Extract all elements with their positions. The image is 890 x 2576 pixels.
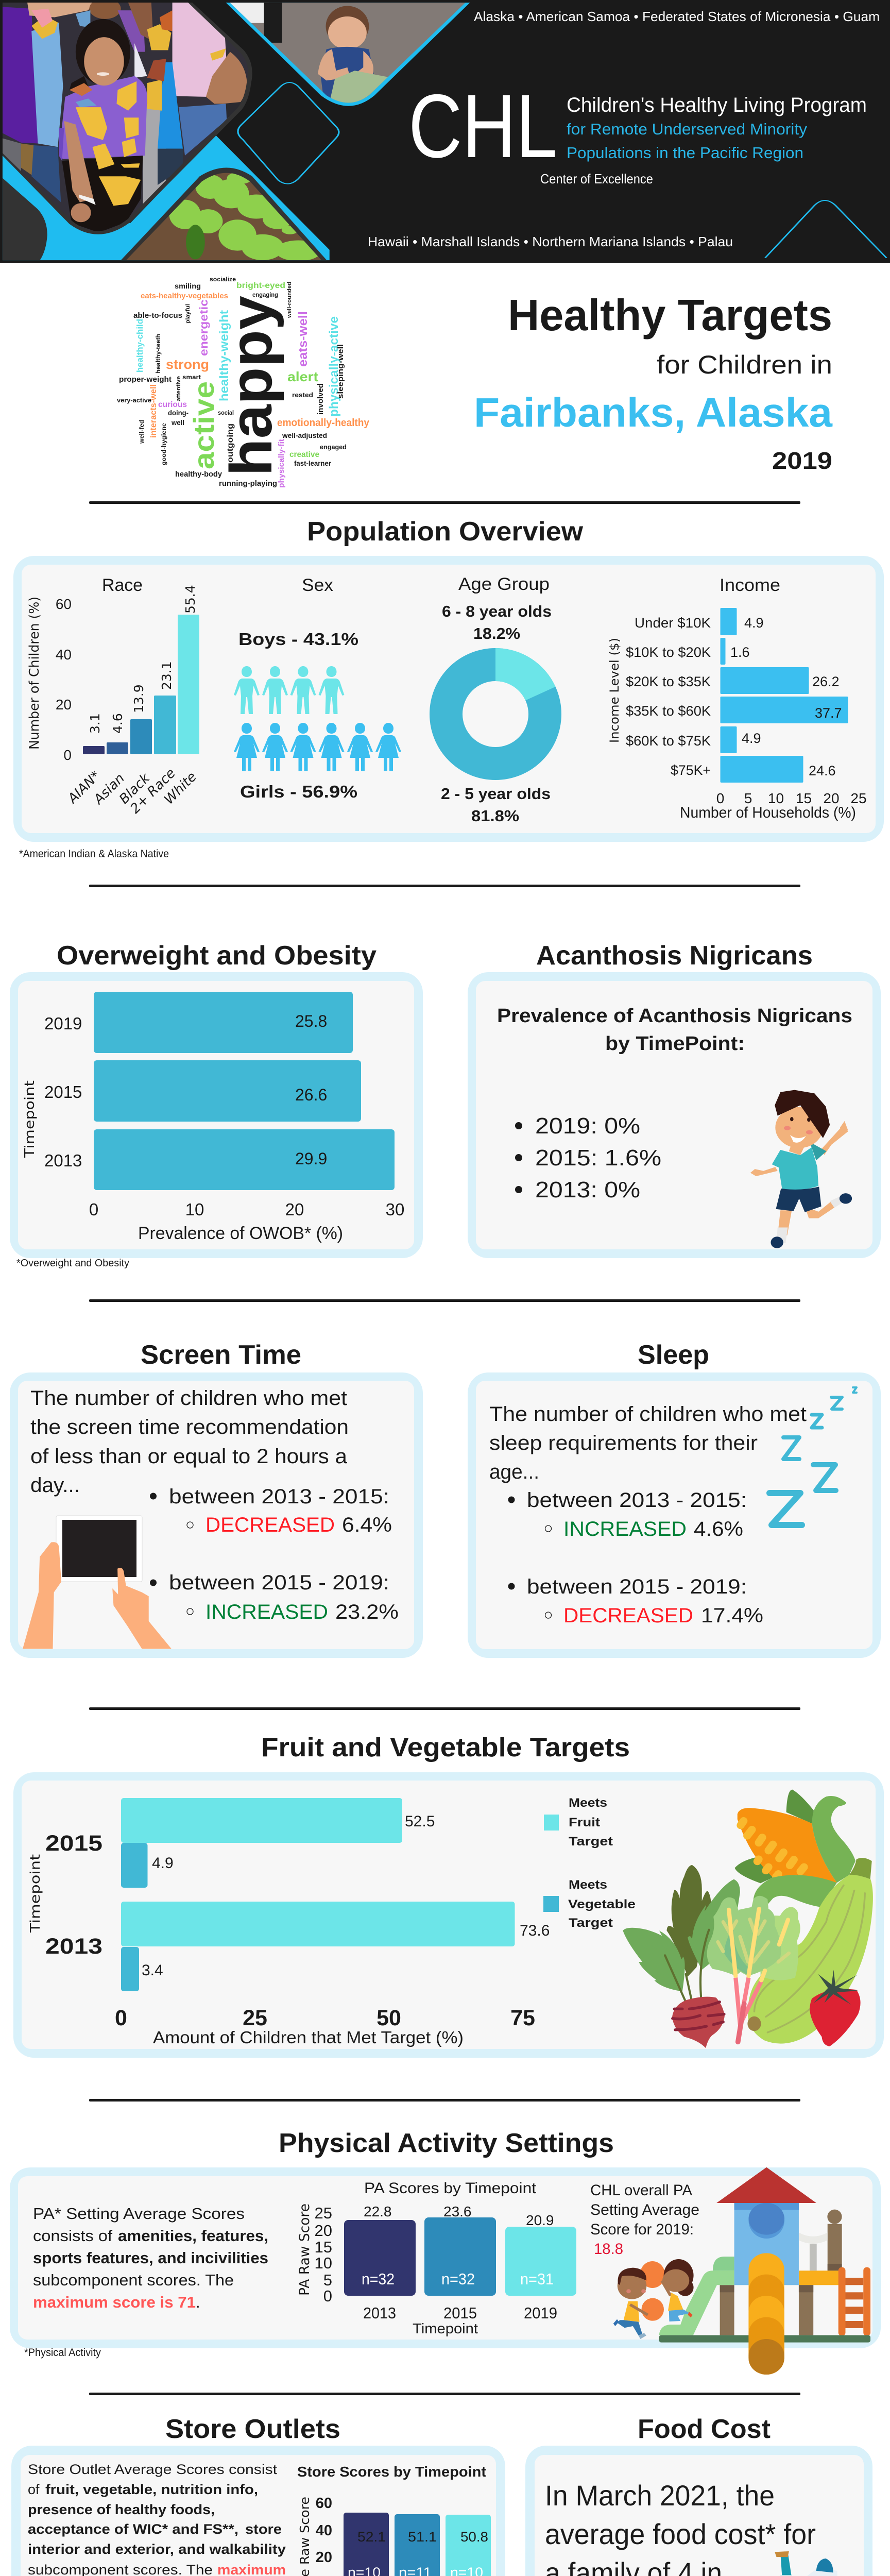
banner graphics: toddler photo and outlines <box>226 0 886 258</box>
heading: population overview: Population Overview <box>307 517 584 547</box>
footnote: OWOB: *Overweight and Obesity <box>16 1258 129 1269</box>
chart: race: 3.1 <box>88 713 102 734</box>
bar chart: fruit and vegetable: 2013 <box>45 1934 102 1959</box>
panel: screen time <box>10 1372 423 1658</box>
list: sleep changes: DECREASED <box>563 1604 693 1627</box>
chart: age group donut: 2 - 5 year olds <box>441 785 551 803</box>
legend: vegetable: Target <box>569 1916 613 1930</box>
list: sleep changes <box>508 1489 763 1627</box>
chart: income: 26.2 <box>812 674 840 689</box>
word cloud: well-rounded <box>286 282 293 318</box>
panel: overweight and obesity <box>10 972 423 1258</box>
text: store outlet description: presence of healthy foods, <box>28 2502 215 2517</box>
bar chart: store scores by timepoint: 60 <box>316 2495 332 2512</box>
chart: race: 23.1 <box>159 661 174 690</box>
word cloud: well-adjusted <box>282 431 327 439</box>
bar chart: PA scores by timepoint: 2015 <box>443 2304 477 2322</box>
word cloud: well <box>171 418 184 427</box>
bar chart: PA scores by timepoint: 20.9 <box>526 2212 554 2228</box>
chart: income: $75K+ <box>671 762 711 778</box>
legend: vegetable <box>543 1878 636 1930</box>
bar chart: OWOB: 10 <box>185 1200 204 1219</box>
text: PA description: maximum score is 71 <box>33 2293 196 2311</box>
bar chart: OWOB: 29.9 <box>295 1149 327 1168</box>
bar chart: PA scores by timepoint: Timepoint <box>413 2320 478 2336</box>
word cloud: outgoing <box>226 423 235 463</box>
word cloud: physically-active <box>327 316 341 417</box>
chart: income: 4.9 <box>742 731 761 746</box>
chart: income: $35K to $60K <box>626 703 711 719</box>
bar chart: fruit and vegetable <box>28 1798 550 2047</box>
bar chart: OWOB: 2015 <box>44 1082 82 1101</box>
bar chart: PA scores by timepoint: 25 <box>315 2204 332 2222</box>
word cloud: smiling <box>175 282 201 290</box>
chart: race: Black <box>116 770 153 807</box>
list: screen time changes <box>150 1485 399 1623</box>
list: sleep changes: 4.6% <box>694 1518 743 1540</box>
legend: fruit: Meets <box>569 1796 607 1810</box>
text: store outlet description: interior and exterior, and walkability <box>28 2541 286 2557</box>
callout: CHL overall PA score: Score for 2019: <box>590 2221 694 2238</box>
bar chart: store scores by timepoint: 40 <box>316 2522 332 2539</box>
chart: age group donut: Age Group <box>458 574 550 594</box>
word cloud <box>117 276 370 488</box>
list: screen time changes: 23.2% <box>335 1601 399 1623</box>
chart: income: $60K to $75K <box>626 733 711 749</box>
chart: income: $20K to $35K <box>626 674 711 689</box>
year: 2019 <box>772 447 832 474</box>
chart: age group donut: 81.8% <box>471 807 519 825</box>
bar chart: store scores by timepoint: Store Scores by Timepoint <box>297 2464 486 2480</box>
text: sleep intro <box>489 1403 807 1483</box>
chart: race: 4.6 <box>110 713 125 734</box>
icon: grocery bag <box>741 2551 883 2576</box>
bar chart: fruit and vegetable: Timepoint <box>28 1854 43 1933</box>
bar chart: OWOB: 25.8 <box>295 1012 327 1030</box>
bar chart: PA scores by timepoint: 10 <box>315 2254 332 2272</box>
chart: race <box>27 575 200 817</box>
bar chart: PA scores by timepoint: 0 <box>323 2287 332 2305</box>
chart: income: Income <box>720 575 780 595</box>
legend: fruit: Target <box>569 1835 613 1849</box>
list: prevalence values: 2019: 0% <box>535 1113 640 1139</box>
bar chart: OWOB: 30 <box>386 1200 404 1219</box>
bar chart: fruit and vegetable: 50 <box>376 2006 401 2030</box>
list: screen time changes: between 2015 - 2019: <box>169 1571 389 1594</box>
banner graphics: left photo, lettuce photo and cyan shapes <box>0 0 332 261</box>
panel: acanthosis nigricans <box>468 972 881 1258</box>
subtitle: for Children in <box>657 350 832 379</box>
footnote: AIAN: *American Indian & Alaska Native <box>19 848 169 860</box>
word cloud: smart <box>182 374 201 381</box>
footnote: physical activity: *Physical Activity <box>24 2347 101 2359</box>
list: sleep changes: between 2015 - 2019: <box>527 1575 747 1598</box>
text: store outlet description: Store Outlet Average Scores consist <box>28 2462 278 2477</box>
chart: income: $10K to $20K <box>626 645 711 660</box>
text: PA description: subcomponent scores. The <box>33 2271 234 2289</box>
bar chart: PA scores by timepoint: n=32 <box>362 2270 395 2288</box>
bar chart: OWOB: 20 <box>285 1200 304 1219</box>
legend: fruit: Fruit <box>569 1816 600 1829</box>
chart: income <box>607 575 867 821</box>
chart: sex pictogram <box>234 575 401 801</box>
list: prevalence values: 2015: 1.6% <box>535 1145 661 1171</box>
chart: race: 40 <box>56 647 72 663</box>
word cloud: good-hygiene <box>160 423 167 465</box>
chart: income: 5 <box>744 790 752 806</box>
text: food cost statement <box>544 2479 816 2576</box>
text: screen time intro: day... <box>30 1474 80 1497</box>
title block <box>474 291 833 474</box>
text: sleep intro: The number of children who met <box>489 1403 807 1426</box>
icon: running boy <box>750 1090 852 1248</box>
word cloud: active <box>187 381 220 469</box>
list: screen time changes: between 2013 - 2015: <box>169 1485 389 1508</box>
bar chart: PA scores by timepoint <box>297 2180 576 2336</box>
panel: population overview <box>13 556 884 842</box>
text: store outlet description: fruit, vegetable, nutrition info, <box>45 2482 258 2497</box>
word cloud: bright-eyed <box>236 281 285 290</box>
word cloud: creative <box>289 450 319 459</box>
icon: vegetables and fruit <box>623 1790 873 2048</box>
chart: income: 20 <box>823 790 840 806</box>
regions list bottom: Hawaii • Marshall Islands • Northern Mariana Islands • Palau <box>368 234 733 249</box>
bar chart: fruit and vegetable: 0 <box>115 2006 127 2030</box>
program subtitle line 1: for Remote Underserved Minority <box>567 120 808 138</box>
word cloud: socialize <box>210 276 236 283</box>
bar chart: fruit and vegetable: 2015 <box>45 1831 102 1856</box>
bar chart: fruit and vegetable: 75 <box>510 2006 535 2030</box>
bar chart: fruit and vegetable: Amount of Children that Met Target (%) <box>153 2028 464 2047</box>
chart: race: Number of Children (%) <box>27 597 42 750</box>
word cloud: physically-fit <box>277 439 286 488</box>
word cloud: involved <box>316 383 325 415</box>
list: screen time changes: INCREASED <box>206 1601 328 1623</box>
text: store outlet description: acceptance of WIC* and FS**, <box>28 2521 238 2537</box>
bar chart: fruit and vegetable: 25 <box>243 2006 267 2030</box>
heading: store outlets: Store Outlets <box>165 2414 340 2444</box>
word cloud: engaged <box>320 443 347 451</box>
icon: hands holding tablet <box>23 1516 172 1649</box>
heading: fruit and vegetable targets: Fruit and Vegetable Targets <box>261 1733 630 1762</box>
chart: sex pictogram: Girls - 56.9% <box>240 782 357 801</box>
text: prevalence heading: Prevalence of Acanthosis Nigricans <box>497 1005 852 1027</box>
bar chart: PA scores by timepoint: PA Raw Score <box>297 2204 313 2296</box>
word cloud: eats-well <box>296 311 310 367</box>
word cloud: engaging <box>252 291 278 298</box>
word cloud: doing- <box>168 409 189 417</box>
text: PA description: sports features, and incivilities <box>33 2249 268 2267</box>
bar chart: PA scores by timepoint: 15 <box>315 2238 332 2256</box>
word cloud: emotionally-healthy <box>277 417 370 429</box>
heading: acanthosis nigricans: Acanthosis Nigricans <box>536 941 813 971</box>
text: PA description: consists of <box>33 2227 112 2245</box>
chart: age group donut: 6 - 8 year olds <box>442 602 552 620</box>
chart: income: 1.6 <box>730 645 750 660</box>
heading: food cost: Food Cost <box>638 2414 771 2444</box>
chart: income: 4.9 <box>744 615 764 631</box>
bar chart: store scores by timepoint: 52.1 <box>357 2529 386 2545</box>
chart: race: AIAN* <box>64 768 104 807</box>
text: screen time intro: The number of children who met <box>30 1387 347 1410</box>
chart: age group donut <box>441 574 555 825</box>
program subtitle line 2: Populations in the Pacific Region <box>567 144 803 162</box>
word cloud: strong <box>166 357 209 372</box>
callout: CHL overall PA score: CHL overall PA <box>590 2182 692 2199</box>
chart: sex pictogram: Boys - 43.1% <box>238 630 358 649</box>
list: sleep changes: 17.4% <box>701 1604 763 1627</box>
chart: race: 2+ Race <box>127 766 179 817</box>
panel: physical activity settings <box>10 2167 881 2348</box>
bar chart: PA scores by timepoint: 20 <box>315 2222 332 2240</box>
bar chart: fruit and vegetable: 3.4 <box>142 1962 163 1979</box>
list: prevalence values <box>515 1113 661 1202</box>
bar chart: fruit and vegetable: 4.9 <box>152 1855 174 1872</box>
bar chart: fruit and vegetable: 52.5 <box>405 1813 435 1830</box>
word cloud: attentive <box>176 376 182 401</box>
word cloud: able-to-focus <box>133 311 182 320</box>
banner <box>0 0 890 263</box>
title: Healthy Targets <box>508 291 832 340</box>
icon: playground with children <box>613 2167 870 2375</box>
bar chart: OWOB: 2019 <box>44 1014 82 1033</box>
panel: store outlets <box>11 2446 505 2576</box>
text: food cost statement: average food cost* for <box>545 2518 816 2550</box>
text: prevalence heading: by TimePoint: <box>605 1033 745 1055</box>
callout: CHL overall PA score: 18.8 <box>594 2241 623 2258</box>
bar chart: store scores by timepoint: 51.1 <box>408 2529 437 2545</box>
bar chart: OWOB: Prevalence of OWOB* (%) <box>138 1224 343 1243</box>
chart: income: Number of Households (%) <box>680 804 856 821</box>
text: screen time intro: of less than or equal to 2 hours a <box>30 1445 348 1468</box>
chart: income: Income Level ($) <box>607 638 622 743</box>
list: prevalence values: 2013: 0% <box>535 1177 640 1202</box>
program name: Children's Healthy Living Program <box>567 94 867 116</box>
chart: race: 0 <box>63 747 72 763</box>
word cloud: alert <box>287 369 318 384</box>
panel: food cost <box>525 2446 872 2576</box>
chart: income: 25 <box>850 790 867 806</box>
heading: overweight and obesity: Overweight and Obesity <box>57 941 376 971</box>
chart: race: 60 <box>56 596 72 612</box>
word cloud: happy <box>218 296 284 476</box>
word cloud: healthy-weight <box>217 310 231 401</box>
chart: race: 55.4 <box>183 585 198 614</box>
chart: income: Under $10K <box>635 615 711 631</box>
bar chart: store scores by timepoint <box>297 2464 491 2576</box>
list: screen time changes: 6.4% <box>342 1514 392 1536</box>
bar chart: PA scores by timepoint: 2013 <box>363 2304 396 2322</box>
center of excellence: Center of Excellence <box>540 171 653 187</box>
text: sleep intro: age... <box>489 1461 539 1483</box>
text: PA description: PA* Setting Average Scores <box>33 2205 245 2223</box>
text: PA description: . <box>196 2293 200 2311</box>
list: screen time changes: DECREASED <box>206 1514 335 1536</box>
word cloud: social <box>218 409 234 416</box>
word cloud: eats-healthy-vegetables <box>141 292 228 300</box>
bar chart: PA scores by timepoint: 5 <box>323 2271 332 2289</box>
legend: vegetable: Meets <box>569 1878 607 1892</box>
text: PA description <box>33 2205 268 2311</box>
word cloud: rested <box>292 391 313 399</box>
text: screen time intro: the screen time recommendation <box>30 1416 349 1438</box>
word cloud: running-playing <box>219 479 277 488</box>
text: food cost statement: In March 2021, the <box>545 2479 775 2512</box>
bar chart: OWOB: 2013 <box>44 1151 82 1170</box>
word cloud: sleeping-well <box>336 344 345 399</box>
regions list top: Alaska • American Samoa • Federated States of Micronesia • Guam <box>474 9 880 24</box>
text: PA description: amenities, features, <box>118 2227 268 2245</box>
chart: income: 37.7 <box>815 705 842 721</box>
bar chart: PA scores by timepoint: 2019 <box>524 2304 557 2322</box>
word cloud: curious <box>158 400 187 409</box>
chart: race: 13.9 <box>131 684 146 713</box>
chart: race: Asian <box>90 771 128 808</box>
chart: income: 10 <box>768 790 784 806</box>
text: prevalence heading <box>497 1005 852 1055</box>
chart: income: 24.6 <box>809 763 836 778</box>
bar chart: OWOB <box>22 992 404 1243</box>
list: sleep changes: between 2013 - 2015: <box>527 1489 747 1512</box>
chart: race: White <box>161 769 200 807</box>
word cloud: fast-learner <box>294 459 332 467</box>
text: store outlet description: of <box>28 2482 40 2497</box>
chart: income: 0 <box>716 790 724 806</box>
bar chart: OWOB: 0 <box>89 1200 98 1219</box>
word cloud: proper-weight <box>119 375 172 384</box>
chart: race: Race <box>102 575 143 595</box>
bar chart: store scores by timepoint: 20 <box>316 2549 332 2566</box>
word cloud: energetic <box>197 299 210 356</box>
heading: sleep: Sleep <box>638 1340 709 1370</box>
callout: CHL overall PA score: Setting Average <box>590 2201 699 2218</box>
bar chart: PA scores by timepoint: n=31 <box>520 2270 554 2288</box>
word cloud: playful <box>185 304 191 324</box>
icon: sleeping z's <box>769 1387 857 1525</box>
bar chart: store scores by timepoint: 50.8 <box>460 2529 488 2545</box>
callout: CHL overall PA score <box>590 2182 699 2258</box>
CHL logo letters: CHL <box>408 76 557 177</box>
legend: fruit <box>544 1796 613 1849</box>
bar chart: OWOB: 26.6 <box>295 1086 327 1104</box>
text: store outlet description <box>28 2462 286 2576</box>
panel: fruit and vegetable targets <box>13 1772 884 2058</box>
chart: race: 20 <box>56 697 72 713</box>
bar chart: PA scores by timepoint: 22.8 <box>364 2204 391 2219</box>
chart: income: 15 <box>796 790 812 806</box>
bar chart: PA scores by timepoint: n=32 <box>441 2270 475 2288</box>
heading: physical activity settings: Physical Activity Settings <box>279 2128 614 2158</box>
chart: sex pictogram: Sex <box>302 575 333 595</box>
word cloud: well-fed <box>138 420 145 444</box>
heading: screen time: Screen Time <box>141 1340 301 1370</box>
bar chart: fruit and vegetable: 73.6 <box>520 1922 550 1939</box>
bar chart: OWOB: Timepoint <box>22 1080 38 1158</box>
word cloud: very-active <box>117 397 151 404</box>
text: screen time intro <box>30 1387 349 1497</box>
bar chart: PA scores by timepoint: 23.6 <box>443 2204 472 2219</box>
location: Fairbanks, Alaska <box>474 389 833 435</box>
word cloud: healthy-child <box>135 319 145 372</box>
legend: vegetable: Vegetable <box>568 1897 636 1911</box>
text: store outlet description: store <box>245 2521 282 2537</box>
panel: sleep <box>468 1372 881 1658</box>
chart: age group donut: 18.2% <box>473 624 520 642</box>
word cloud: healthy-teeth <box>155 334 162 374</box>
word cloud: interacts-well <box>148 384 158 438</box>
bar chart: PA scores by timepoint: PA Scores by Timepoint <box>364 2180 537 2197</box>
list: sleep changes: INCREASED <box>563 1518 687 1540</box>
text: sleep intro: sleep requirements for their <box>489 1432 758 1454</box>
word cloud: healthy-body <box>175 470 222 479</box>
